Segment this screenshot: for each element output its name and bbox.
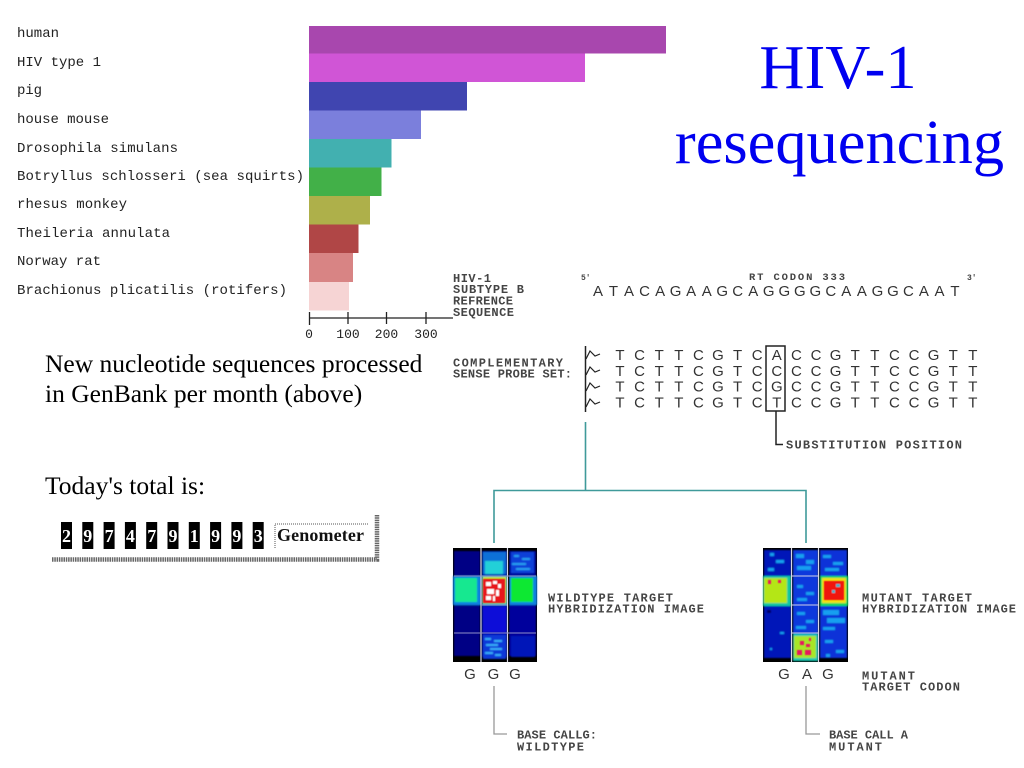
codon markers: 3' (967, 274, 977, 283)
bar labels: Norway rat (17, 254, 101, 270)
counter digits: 7 (147, 526, 156, 546)
x axis: 200 (375, 327, 398, 342)
probe sequences: TCTTCGTCGCCGTTCCGTT (615, 378, 977, 396)
probe set label: SENSE PROBE SET: (453, 368, 572, 382)
mutant target codon label: TARGET CODON (862, 680, 960, 694)
counter digits: 1 (190, 526, 199, 546)
mutant base call label (829, 728, 909, 754)
wildtype base call label (517, 728, 597, 754)
bar labels: Botryllus schlosseri (sea squirts) (17, 169, 304, 185)
probe set block (453, 346, 977, 452)
wildtype label: WILDTYPE TARGET (548, 592, 673, 606)
text: today's total: Today's total is: (45, 471, 205, 500)
reference sequence block (453, 272, 977, 320)
counter digits: 4 (126, 526, 135, 546)
mutant hybridization panel (763, 548, 1016, 754)
title: HIV-1 (759, 33, 917, 102)
bar labels (17, 26, 304, 299)
mutant label: MUTANT TARGET (862, 592, 972, 606)
probe sequences (615, 347, 977, 412)
codon markers (581, 272, 977, 284)
wildtype heatmap (453, 548, 537, 662)
codon markers: 5' (581, 274, 591, 283)
codon markers: RT CODON 333 (749, 272, 845, 284)
title (675, 33, 1004, 177)
bar labels: rhesus monkey (17, 197, 127, 213)
probe set label: COMPLEMENTARY (453, 356, 564, 370)
counter digits: 9 (232, 526, 241, 546)
caption: new nucleotide sequences: in GenBank per month (above) (45, 379, 362, 408)
genometer counter (52, 515, 377, 560)
bar chart: GenBank sequences by organism (17, 26, 666, 342)
bar labels: Drosophila simulans (17, 141, 178, 157)
substitution position box and leader (766, 346, 785, 444)
counter digits: 3 (254, 526, 263, 546)
bar labels: HIV type 1 (17, 55, 101, 71)
mutant label (862, 592, 1016, 616)
teal branching connector (494, 422, 806, 543)
x axis (305, 312, 453, 342)
probe anchor line and squiggles (586, 346, 600, 412)
mutant target codon label: MUTANT (862, 670, 915, 684)
counter digits: 2 (62, 526, 71, 546)
counter digits: 9 (211, 526, 220, 546)
mutant base call label: BASE CALL A (829, 728, 909, 742)
mutant base call label: MUTANT (829, 740, 882, 754)
counter shadow frame (52, 515, 377, 560)
wildtype base call label: WILDTYPE (517, 740, 584, 754)
counter digits: 7 (105, 526, 114, 546)
mutant base call leader (806, 686, 820, 734)
mutant target codon label (862, 670, 960, 694)
probe sequences: TCTTCGTCACCGTTCCGTT (615, 347, 977, 364)
x axis: 100 (336, 327, 360, 342)
substitution position label: SUBSTITUTION POSITION (786, 438, 962, 452)
caption: new nucleotide sequences: New nucleotide sequences processed (45, 349, 423, 378)
mutant codon: GAG (778, 666, 834, 683)
reference label: HIV-1 (453, 272, 491, 286)
reference label: SEQUENCE (453, 306, 514, 320)
wildtype label (548, 592, 704, 616)
wildtype codon: GGG (464, 666, 521, 683)
probe sequences: TCTTCGTCTCCGTTCCGTT (615, 394, 977, 412)
wildtype base call leader (494, 686, 507, 734)
bar labels: Brachionus plicatilis (rotifers) (17, 283, 287, 299)
bar labels: Theileria annulata (17, 226, 170, 242)
reference label: SUBTYPE B (453, 283, 524, 297)
title: resequencing (675, 108, 1004, 177)
bars (309, 26, 666, 310)
wildtype label: HYBRIDIZATION IMAGE (548, 602, 704, 616)
genometer label: Genometer (277, 525, 364, 545)
x axis: 0 (305, 327, 313, 342)
bar labels: human (17, 26, 59, 42)
reference label (453, 272, 524, 320)
counter digits: 9 (168, 526, 178, 546)
x axis: 300 (414, 327, 438, 342)
counter digits: 9 (83, 526, 92, 546)
bar labels: pig (17, 83, 42, 99)
probe sequences: TCTTCGTCCCCGTTCCGTT (615, 363, 977, 380)
mutant heatmap (763, 548, 848, 662)
caption: new nucleotide sequences (45, 349, 423, 408)
reference label: REFRENCE (453, 294, 513, 308)
probe set label (453, 356, 572, 382)
wildtype base call label: BASE CALLG: (517, 728, 597, 742)
wildtype hybridization panel (453, 548, 704, 754)
counter digits (61, 522, 264, 549)
mutant label: HYBRIDIZATION IMAGE (862, 602, 1016, 616)
bar labels: house mouse (17, 112, 109, 128)
reference nucleotide sequence: ATACAGAAGCAGGGGCAAGGCAAT (593, 283, 960, 300)
